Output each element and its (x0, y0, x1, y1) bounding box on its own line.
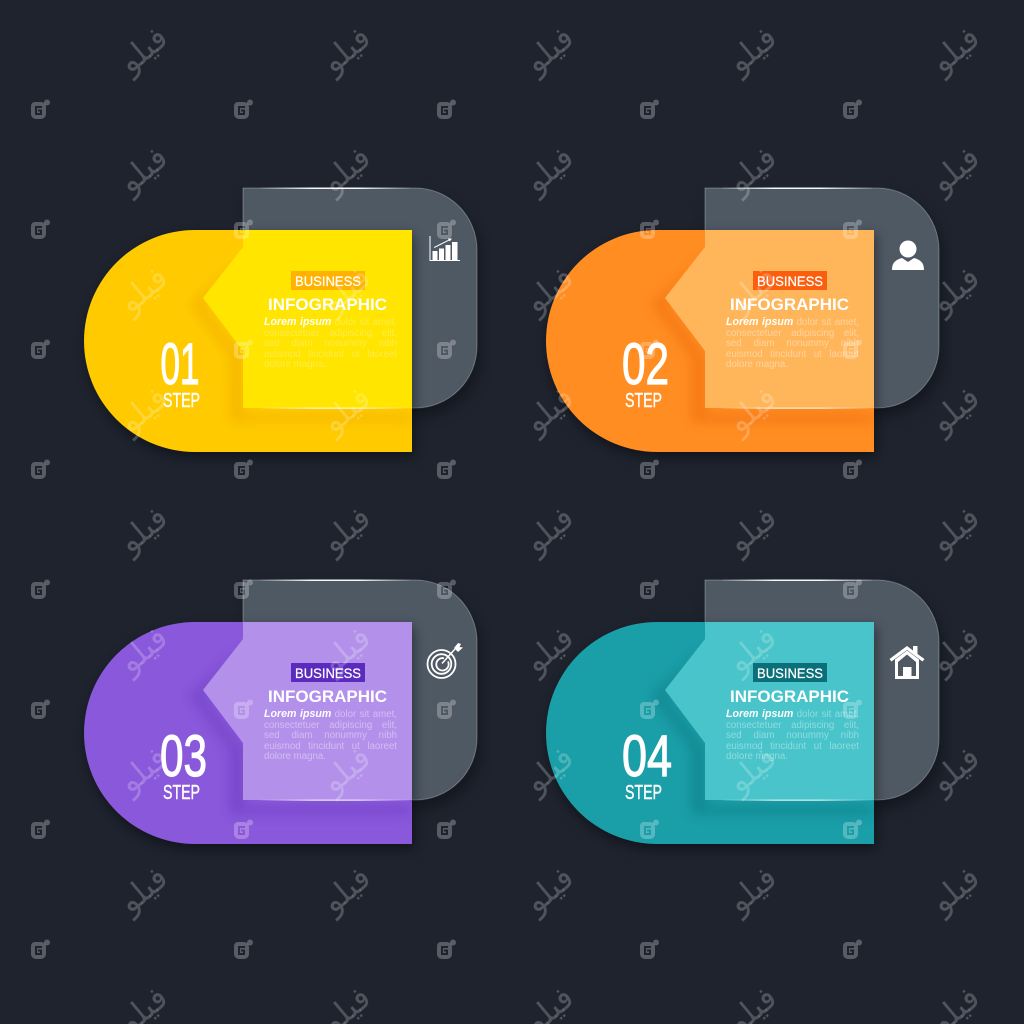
watermark: script marks: فیلو (921, 258, 987, 322)
glass overlap arrow (203, 188, 412, 409)
body text: sed diam nonummy nibh (726, 730, 859, 741)
coloured tab shape (546, 622, 876, 849)
step number: 04 (622, 724, 672, 789)
body text: consectetuer adipiscing elit, (726, 720, 859, 731)
watermark: script marks: فیلو (515, 498, 581, 562)
watermark: script marks: فیلو (109, 258, 175, 322)
heading: infographic: INFOGRAPHIC (730, 295, 849, 314)
watermark: script marks: فیلو (515, 258, 581, 322)
watermark: script marks: فیلو (921, 498, 987, 562)
panel: step 04 teal (546, 580, 943, 851)
heading: infographic: INFOGRAPHIC (268, 687, 387, 706)
watermark: script marks: فیلو (515, 858, 581, 922)
heading: infographic: INFOGRAPHIC (268, 295, 387, 314)
step label: STEP (625, 390, 662, 412)
body text: consectetuer adipiscing elit, (264, 720, 397, 731)
watermark: script marks: فیلو (312, 858, 378, 922)
panel: step 01 yellow (84, 188, 481, 459)
watermark: script marks: فیلو (921, 618, 987, 682)
watermark: script marks: فیلو (718, 258, 784, 322)
icon: house (890, 646, 924, 679)
watermark: script marks: فیلو (109, 138, 175, 202)
watermark: script marks: فیلو (515, 138, 581, 202)
glass overlap arrow (203, 580, 412, 801)
watermark: script marks: فیلو (312, 618, 378, 682)
icon: target (428, 643, 463, 678)
body text: dolore magna. (264, 359, 326, 370)
watermark: script marks: فیلو (921, 138, 987, 202)
watermark: script marks: فیلو (312, 258, 378, 322)
body text: euismod tincidunt ut laoreet (264, 741, 397, 752)
body text: dolore magna. (726, 359, 788, 370)
coloured tab shape (84, 230, 414, 457)
watermark: script marks: فیلو (109, 498, 175, 562)
watermark: script marks: فیلو (515, 378, 581, 442)
heading: infographic: INFOGRAPHIC (730, 687, 849, 706)
badge: business: BUSINESS (757, 273, 823, 289)
glass panel (243, 188, 481, 416)
watermark: script marks: فیلو (515, 738, 581, 802)
body text: euismod tincidunt ut laoreet (726, 741, 859, 752)
body text (726, 316, 859, 370)
glass panel (705, 188, 943, 416)
panel: step 03 purple (84, 580, 481, 851)
body text: Lorem ipsum dolor sit amet, (726, 708, 859, 720)
watermark: script marks: فیلو (312, 738, 378, 802)
watermark: script marks: فیلو (109, 18, 175, 82)
watermark: script marks: فیلو (921, 738, 987, 802)
body text: dolore magna. (726, 751, 788, 762)
watermark: script marks: فیلو (718, 138, 784, 202)
badge: business: BUSINESS (757, 665, 823, 681)
body text: Lorem ipsum dolor sit amet, (264, 708, 397, 720)
panel: step 02 orange (546, 188, 943, 459)
watermark: script marks: فیلو (718, 498, 784, 562)
glass overlap arrow (665, 188, 874, 409)
badge: business: BUSINESS (295, 665, 361, 681)
step number: 02 (622, 332, 669, 397)
watermark: script marks: فیلو (718, 18, 784, 82)
watermark: script marks: فیلو (109, 738, 175, 802)
watermark: script marks: فیلو (515, 18, 581, 82)
coloured tab shape (84, 622, 414, 849)
glass panel (705, 580, 943, 808)
watermark: script marks: فیلو (109, 858, 175, 922)
body text: dolore magna. (264, 751, 326, 762)
watermark: script marks: فیلو (312, 18, 378, 82)
body text (264, 316, 397, 370)
body text: consectetuer adipiscing elit, (264, 328, 397, 339)
step label: STEP (163, 782, 200, 804)
step number: 01 (160, 332, 200, 397)
watermark: script marks: فیلو (109, 378, 175, 442)
step label: STEP (163, 390, 200, 412)
body text: sed diam nonummy nibh (264, 338, 397, 349)
watermark: script marks: فیلو (312, 378, 378, 442)
body text: sed diam nonummy nibh (726, 338, 859, 349)
watermark: script marks: فیلو (312, 138, 378, 202)
watermark: script marks: فیلو (718, 378, 784, 442)
badge: business: BUSINESS (295, 273, 361, 289)
step label: STEP (625, 782, 662, 804)
watermark: script marks: فیلو (921, 378, 987, 442)
watermark: script marks: فیلو (718, 738, 784, 802)
coloured tab shape (546, 230, 876, 457)
body text: consectetuer adipiscing elit, (726, 328, 859, 339)
watermark: script marks: فیلو (921, 858, 987, 922)
body text (726, 708, 859, 762)
body text: euismod tincidunt ut laoreet (726, 349, 859, 360)
body text: Lorem ipsum dolor sit amet, (264, 316, 397, 328)
watermark: script marks: فیلو (312, 498, 378, 562)
step number: 03 (160, 724, 207, 789)
watermark: script marks: فیلو (109, 618, 175, 682)
glass panel (243, 580, 481, 808)
icon: bar chart (430, 236, 460, 261)
glass overlap arrow (665, 580, 874, 801)
watermark: script marks: فیلو (921, 18, 987, 82)
body text: euismod tincidunt ut laoreet (264, 349, 397, 360)
icon: user (892, 240, 924, 270)
watermark: script marks: فیلو (718, 858, 784, 922)
body text: sed diam nonummy nibh (264, 730, 397, 741)
watermark: script marks: فیلو (718, 618, 784, 682)
body text (264, 708, 397, 762)
body text: Lorem ipsum dolor sit amet, (726, 316, 859, 328)
watermark: script marks: فیلو (515, 618, 581, 682)
